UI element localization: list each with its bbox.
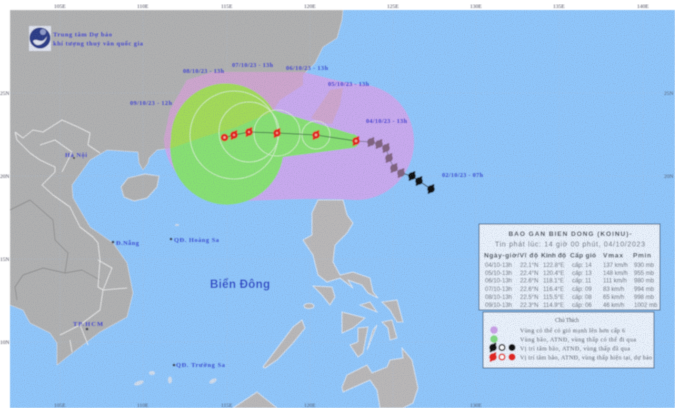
table rows: 65 km/h bbox=[603, 295, 624, 301]
table rows: 04/10-13h bbox=[485, 263, 512, 269]
table rows: 980 mb bbox=[634, 278, 655, 284]
table header bbox=[484, 252, 651, 260]
place labels: Đ.Nẵng bbox=[116, 240, 140, 247]
axis labels: 25N bbox=[0, 91, 10, 97]
place labels bbox=[65, 152, 226, 369]
axis labels: 20N bbox=[664, 174, 674, 180]
table title: BAO GAN BIEN DONG (KOINU)- bbox=[508, 231, 632, 238]
place labels: QĐ. Hoàng Sa bbox=[174, 237, 220, 244]
table rows: 07/10-13h bbox=[485, 287, 512, 293]
forecast positions: red icons bbox=[221, 127, 360, 146]
table rows: 111 km/h bbox=[603, 278, 627, 284]
table header: Ngày-giờ/Vĩ độ bbox=[484, 252, 538, 260]
panel: legend bbox=[483, 312, 654, 368]
table rows: 114.9°E bbox=[543, 303, 564, 309]
table rows: 998 mb bbox=[634, 295, 655, 301]
table rows: 118.1°E bbox=[543, 278, 564, 284]
table rows: 115.5°E bbox=[543, 295, 564, 301]
table rows: 930 mb bbox=[634, 263, 655, 269]
table rows: 22.5°N bbox=[520, 295, 538, 301]
table rows: 09/10-13h bbox=[485, 303, 512, 309]
table rows: cấp: 09 bbox=[572, 287, 592, 293]
table rows: 22.4°N bbox=[520, 271, 538, 277]
forecast zone: strong winds (purple) bbox=[164, 72, 414, 201]
table rows: 06/10-13h bbox=[485, 278, 512, 284]
table rows: 22.6°N bbox=[520, 278, 538, 284]
table rows: 955 mb bbox=[634, 271, 655, 277]
table rows: 148 km/h bbox=[603, 271, 628, 277]
legend text: Vị trí tâm bão, ATNĐ, vùng thấp hiện tại, dự báo bbox=[520, 354, 652, 362]
table rows: 22.1°N bbox=[520, 263, 538, 269]
table rows: 46 km/h bbox=[603, 303, 624, 309]
table rows: 116.4°E bbox=[543, 287, 564, 293]
axis labels: 135E bbox=[553, 4, 565, 10]
legend text: Vùng bão, ATNĐ, vùng thấp có thể đi qua bbox=[520, 336, 636, 344]
axis labels: 120E bbox=[304, 4, 316, 10]
date labels along the track: 07/10/23 - 13h bbox=[232, 62, 273, 69]
axis labels: 20N bbox=[0, 174, 10, 180]
table rows: cấp: 08 bbox=[572, 295, 592, 301]
axis labels: 25N bbox=[664, 91, 674, 97]
table rows: 83 km/h bbox=[603, 287, 624, 293]
table rows: cấp: 11 bbox=[572, 278, 592, 284]
legend icons: current and forecast positions bbox=[489, 352, 516, 362]
axis labels: 15N bbox=[0, 257, 10, 263]
place labels: TP.HCM bbox=[73, 321, 103, 328]
legend swatch: purple zone bbox=[490, 326, 498, 334]
legend swatch: green zone bbox=[490, 335, 498, 343]
axis labels: 125E bbox=[387, 4, 399, 10]
table header: Pmin bbox=[633, 252, 651, 260]
organisation name: khí tượng thuỷ văn quốc gia bbox=[53, 40, 144, 48]
date labels along the track: 05/10/23 - 13h bbox=[328, 81, 369, 88]
date labels along the track bbox=[130, 62, 483, 179]
land: Hainan island bbox=[121, 174, 159, 201]
land: mainland Asia bbox=[10, 10, 343, 365]
legend title: Chú Thích bbox=[555, 318, 579, 324]
table rows: 122.8°E bbox=[543, 263, 564, 269]
land: Philippines and Borneo bbox=[233, 200, 418, 408]
legend text bbox=[520, 328, 652, 362]
organisation name bbox=[53, 32, 144, 48]
storm track line bbox=[224, 132, 431, 189]
past positions: muted purple icons bbox=[367, 137, 405, 178]
country and province borders bbox=[10, 120, 127, 352]
table header: Cấp gió bbox=[570, 252, 596, 260]
logo bbox=[29, 26, 51, 51]
table rows: cấp: 13 bbox=[572, 271, 592, 277]
axis labels: 10N bbox=[0, 340, 10, 346]
issue time: Tin phát lúc: 14 giờ 00 phút, 04/10/2023 bbox=[495, 242, 645, 248]
sea name: Biển Đông bbox=[210, 279, 270, 291]
date labels along the track: 08/10/23 - 13h bbox=[183, 68, 224, 75]
table rows: 1002 mb bbox=[634, 303, 658, 309]
axis labels: 115E bbox=[221, 4, 233, 10]
table rows: 137 km/h bbox=[603, 263, 628, 269]
date labels along the track: 04/10/23 - 13h bbox=[366, 118, 407, 125]
date labels along the track: 06/10/23 - 13h bbox=[286, 65, 328, 72]
panel: storm data table bbox=[479, 224, 660, 310]
table rows: 08/10-13h bbox=[485, 295, 512, 301]
storm cone over land (lime) bbox=[170, 84, 272, 148]
islands: Spratly reefs bbox=[134, 224, 217, 387]
axis labels: 130E bbox=[470, 4, 482, 10]
table rows: cấp: 06 bbox=[572, 303, 592, 309]
place labels: Hà Nội bbox=[65, 152, 87, 159]
axis labels: 105E bbox=[54, 4, 66, 10]
table rows bbox=[485, 263, 658, 309]
table rows: cấp: 14 bbox=[572, 263, 592, 269]
date labels along the track: 09/10/23 - 12h bbox=[130, 100, 172, 107]
table rows: 994 mb bbox=[634, 287, 655, 293]
forecast zone over land (pink) bbox=[164, 72, 343, 149]
legend icons: past positions bbox=[489, 343, 516, 352]
storm cone (green) bbox=[170, 84, 359, 205]
table header: Kinh độ bbox=[541, 252, 566, 260]
table rows: 22.3°N bbox=[520, 303, 538, 309]
axis labels: 140E bbox=[637, 4, 649, 10]
table header: Vmax bbox=[603, 252, 623, 260]
organisation name: Trung tâm Dự báo bbox=[53, 32, 112, 38]
legend text: Vùng có thể có gió mạnh lên hơn cấp 6 bbox=[520, 328, 625, 334]
legend text: Vị trí tâm bão, ATNĐ, vùng thấp đã qua bbox=[520, 346, 630, 352]
forecast radius circles bbox=[190, 91, 330, 179]
axis labels: 110E bbox=[137, 4, 149, 10]
table rows: 120.4°E bbox=[543, 271, 564, 277]
place labels: QĐ. Trường Sa bbox=[176, 362, 226, 369]
past positions: black icons bbox=[408, 171, 435, 194]
table rows: 22.6°N bbox=[520, 287, 538, 293]
table rows: 05/10-13h bbox=[485, 271, 512, 277]
date labels along the track: 02/10/23 - 07h bbox=[442, 172, 483, 179]
